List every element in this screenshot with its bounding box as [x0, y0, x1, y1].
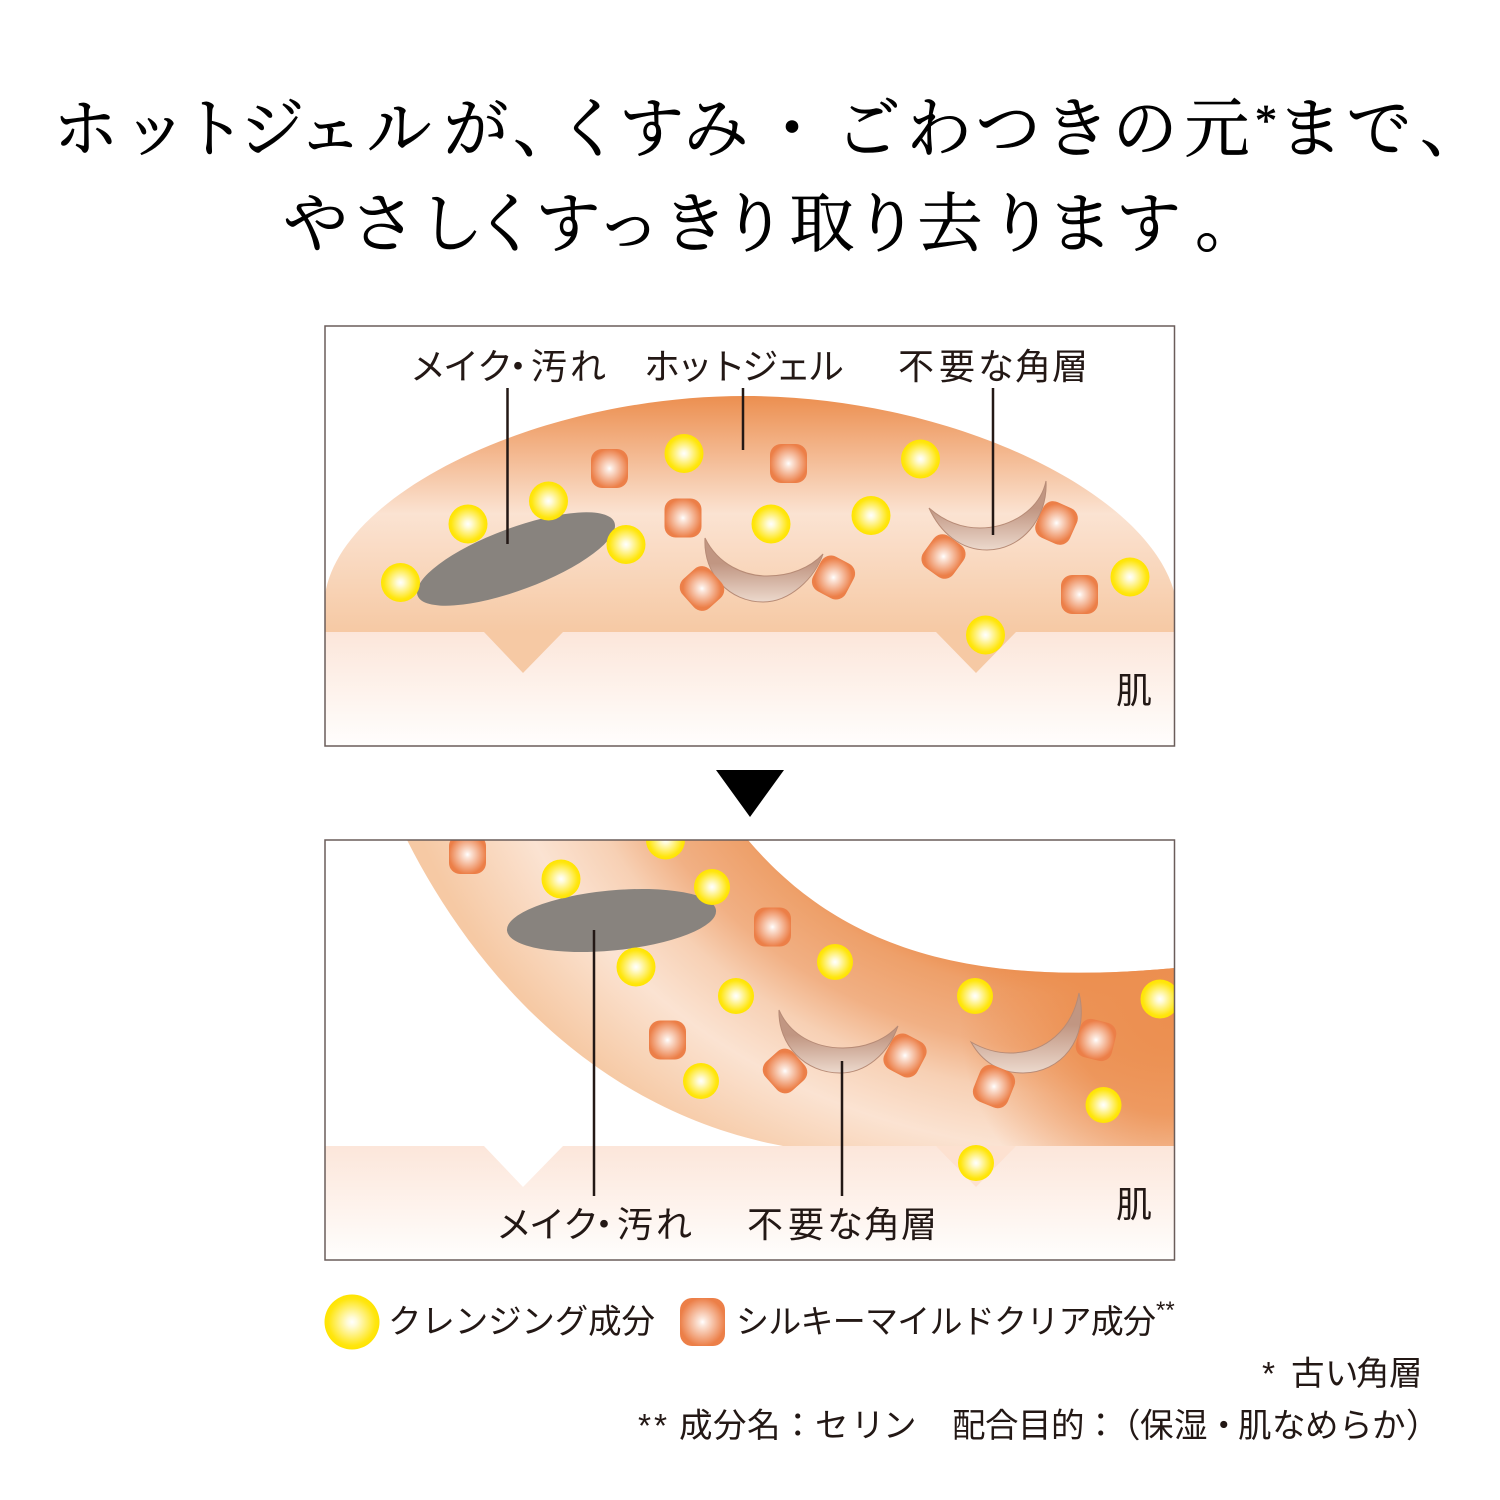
label: unneeded keratin: 不要な角層	[898, 346, 1088, 387]
title: *	[1255, 96, 1277, 145]
old keratin flakes	[779, 993, 1081, 1073]
old keratin flakes	[705, 481, 1046, 602]
leader lines	[508, 388, 993, 544]
title: まで、	[1278, 76, 1485, 170]
arrow down	[716, 770, 784, 817]
footnotes: ingredient name and purpose	[638, 1408, 1440, 1445]
panel border	[325, 840, 1174, 1260]
icon: silky mild clear ingredient	[680, 1298, 725, 1346]
title: やさしくすっきり取り去ります。	[283, 171, 1260, 265]
panel: before, gel on skin	[325, 326, 1175, 746]
leader lines	[594, 930, 842, 1196]
legend footnote mark: **	[1156, 1297, 1175, 1324]
title	[53, 76, 1485, 265]
label: skin: 肌	[1116, 670, 1152, 711]
legend text: silky mild clear ingredient: シルキーマイルドクリア成分	[736, 1303, 1156, 1340]
label: makeup and dirt: メイク・汚れ	[410, 346, 606, 387]
footnotes: ingredient name and purpose: 成分名：セリン	[679, 1408, 916, 1445]
skin layer	[326, 632, 1174, 726]
silky mild clear particles	[591, 444, 1098, 615]
panel border	[325, 326, 1174, 746]
silky mild clear particles	[449, 835, 1119, 1112]
label: makeup and dirt: メイク・汚れ	[496, 1204, 692, 1245]
cleansing particles	[381, 434, 1150, 654]
label: hot gel: ホットジェル	[644, 346, 844, 387]
skin layer with pore notches	[326, 1146, 1174, 1240]
legend text: cleansing ingredient: クレンジング成分	[388, 1304, 655, 1341]
legend	[324, 1294, 1175, 1350]
footnotes: ingredient name and purpose: **	[638, 1408, 667, 1445]
label: unneeded keratin: 不要な角層	[747, 1204, 937, 1245]
lifted hot gel band	[407, 840, 1175, 1146]
panel: after, gel lifted from skin	[325, 820, 1180, 1260]
makeup dirt	[506, 889, 716, 952]
makeup dirt	[417, 512, 615, 606]
icon: cleansing ingredient	[324, 1294, 380, 1350]
title: ホットジェルが、くすみ・ごわつきの元	[53, 76, 1250, 170]
gel in pore	[936, 1146, 1016, 1187]
hot gel dome	[325, 396, 1175, 673]
cleansing particles	[542, 820, 1180, 1181]
footnote: old keratin: *古い角層	[1262, 1356, 1422, 1393]
label: skin: 肌	[1116, 1184, 1152, 1225]
footnotes: ingredient name and purpose: 配合目的：（保湿・肌なめらか）	[952, 1408, 1440, 1445]
